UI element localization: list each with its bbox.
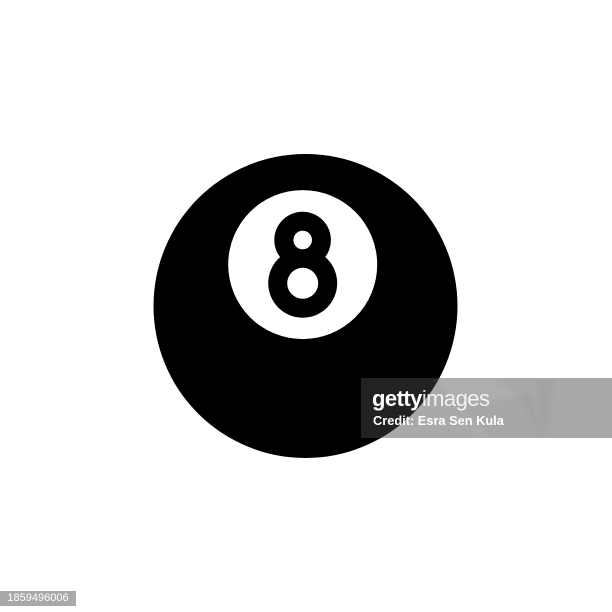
image id label xyxy=(0,591,76,606)
image id label: 1859496006 xyxy=(7,592,69,604)
ball body xyxy=(154,154,458,458)
watermark logo text: gettyimages xyxy=(372,386,489,411)
watermark banner xyxy=(361,378,612,438)
watermark credit text: Credit: Esra Sen Kula xyxy=(373,413,504,428)
numeral 8 xyxy=(268,212,337,318)
white number circle xyxy=(228,190,377,339)
watermark texture xyxy=(436,380,438,382)
